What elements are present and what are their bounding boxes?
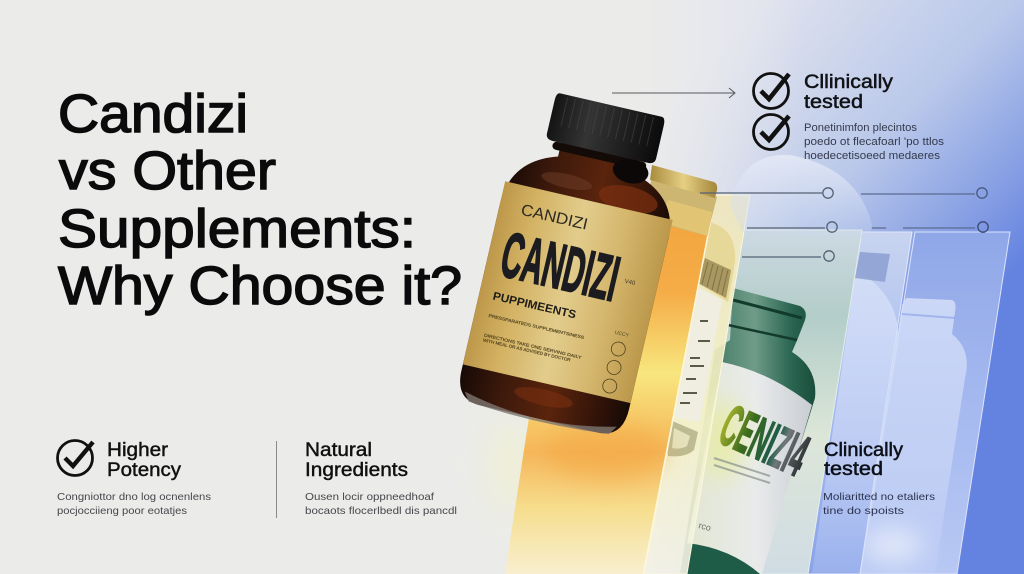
label: badge caption: UCCY xyxy=(614,330,630,339)
label: fine print xyxy=(482,313,587,365)
icon: green bottle xyxy=(680,288,818,574)
heading: higher potency: Higher xyxy=(107,439,169,461)
icon: ghost glass dome xyxy=(730,155,872,240)
heading: clinically tested bottom xyxy=(824,439,903,480)
panel: middle blue glass xyxy=(760,232,912,574)
bottle base highlight xyxy=(462,392,617,439)
heading: clinically tested top xyxy=(804,71,893,113)
divider xyxy=(276,441,277,518)
label: fine print: PRESSPARATEDS SUPPLEMENTSINESS xyxy=(488,313,585,340)
heading: natural ingredients xyxy=(305,439,408,481)
title: Candizi xyxy=(58,84,248,144)
title: Why Choose it? xyxy=(58,256,462,316)
text: bottom right description xyxy=(823,491,935,517)
text: top description: Ponetinimfon plecintos xyxy=(804,122,917,134)
text: top description: poedo ot flecafoarl 'po ttlos xyxy=(804,136,945,148)
label: fine print: WITH MEAL OR AS ADVISED BY DOCTOR xyxy=(482,337,571,362)
heading: clinically tested bottom: Clinically xyxy=(824,439,903,461)
text: natural ingredients description: Ousen locir oppneedhoaf xyxy=(305,491,434,503)
panel: green glass xyxy=(687,230,862,574)
panel: pale glass xyxy=(640,195,750,574)
text: higher potency description: pocjocciieng poor eotatjes xyxy=(57,505,187,517)
heading: clinically tested top: tested xyxy=(804,91,863,113)
title: Supplements: xyxy=(58,199,416,259)
heading: natural ingredients: Natural xyxy=(305,439,372,461)
gold label xyxy=(463,181,673,403)
arrow: to clinically tested xyxy=(612,88,735,98)
text: top description: hoedecetisoeed medaeres xyxy=(804,150,941,162)
label: badges xyxy=(601,341,627,394)
label: sub brand: PUPPIMEENTS xyxy=(492,291,577,321)
label: fine print: DIRECTIONS TAKE ONE SERVING DAILY xyxy=(483,332,582,360)
text: top description xyxy=(804,122,945,162)
panel: rear blue glass xyxy=(850,232,1010,574)
panel: orange glass xyxy=(505,215,712,574)
connector lines with nodes xyxy=(700,188,988,261)
title: vs Other xyxy=(59,141,276,201)
text: natural ingredients description xyxy=(305,491,457,517)
icon: higher potency check xyxy=(58,440,93,476)
panel: pale glow left of orange xyxy=(490,415,534,515)
text: higher potency description xyxy=(57,491,211,517)
bottle neck ring xyxy=(552,141,647,170)
text: bottom right description: Moliaritted no etaliers xyxy=(823,491,935,503)
text: bottom right description: tine do spoists xyxy=(823,505,904,517)
heading: higher potency: Potency xyxy=(107,459,181,481)
icon: Candizi amber bottle xyxy=(454,86,695,441)
heading: clinically tested top: Cllinically xyxy=(804,71,893,93)
icon: top checkmark 1 xyxy=(754,74,789,108)
icon: top checkmark 2 xyxy=(754,114,789,150)
heading: natural ingredients: Ingredients xyxy=(305,459,408,481)
label small lines xyxy=(714,458,770,483)
bottle body xyxy=(455,129,685,438)
text: natural ingredients description: bocaots flocerlbedl dis pancdl xyxy=(305,505,457,517)
label: small text: rco xyxy=(698,520,712,533)
icon: gold bottle neck and cap xyxy=(640,165,717,236)
bottle cap xyxy=(546,93,666,164)
title xyxy=(58,84,462,316)
icon: gold bottle seen through glass xyxy=(666,222,735,456)
heading: higher potency xyxy=(107,439,181,481)
label: small brand: CANDIZI xyxy=(519,202,589,234)
text: higher potency description: Congniottor dno log ocnenlens xyxy=(57,491,211,503)
heading: clinically tested bottom: tested xyxy=(824,458,883,480)
label: superscript: V40 xyxy=(624,279,636,287)
label: big brand: CANDIZI xyxy=(495,218,626,315)
label text: CENIZI brand: CENIZI4 xyxy=(711,392,818,489)
icon: ghost blue bottle rear xyxy=(850,298,967,574)
icon: ghost blue bottle middle xyxy=(812,252,898,574)
